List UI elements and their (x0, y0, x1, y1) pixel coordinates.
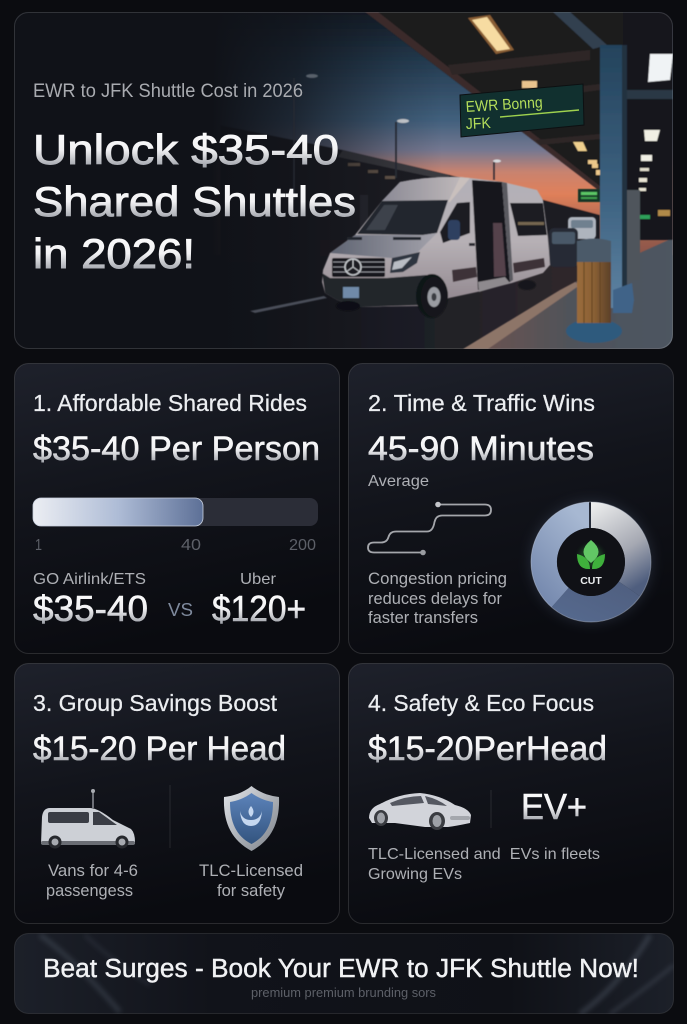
hero kicker: EWR to JFK Shuttle Cost in 2026 (33, 81, 303, 102)
bar scale labels: 1 (35, 537, 42, 554)
heading: 4. Safety & Eco Focus (368, 690, 594, 716)
heading: 1. Affordable Shared Rides (33, 390, 307, 416)
panel: safety and eco (348, 664, 674, 924)
bar scale labels: 200 (289, 537, 316, 554)
caption: licensed: for safety (217, 881, 285, 900)
sign: route display (460, 84, 584, 137)
caption (368, 846, 600, 883)
hero title: Unlock $35-40 (33, 126, 339, 173)
heading: 3. Group Savings Boost (33, 690, 278, 716)
icon: white van (41, 789, 135, 848)
comparison: GO Airlink: GO Airlink/ETS (33, 571, 146, 588)
caption: vans: Vans for 4-6 (48, 861, 138, 880)
congestion text: reduces delays for (368, 590, 502, 608)
panel: time and traffic (348, 364, 674, 654)
hero title (33, 126, 356, 277)
heading: 2. Time & Traffic Wins (368, 390, 595, 416)
icon: winding route (368, 502, 491, 555)
icon: silver sedan (369, 793, 471, 830)
comparison: Uber: Uber (240, 571, 277, 588)
caption: vans (46, 861, 138, 900)
left dark fade (14, 12, 428, 348)
icon: safety shield (224, 786, 279, 851)
hero photo: shuttle van at terminal curb (14, 12, 673, 349)
progress bar (33, 498, 318, 526)
panel: hero (14, 12, 673, 349)
comparison: Uber: $120+ (212, 588, 306, 629)
vs label: VS (168, 600, 193, 620)
call to action headline: Beat Surges - Book Your EWR to JFK Shuttle Now! (43, 955, 639, 983)
congestion text: faster transfers (368, 609, 478, 627)
average label: Average (368, 473, 429, 490)
panel: group savings (14, 664, 340, 924)
hero title: Shared Shuttles (33, 178, 356, 225)
caption: licensed (199, 861, 303, 900)
bar scale labels (35, 537, 316, 554)
congestion text (368, 570, 507, 627)
tagline: premium premium brunding sors (251, 986, 436, 1000)
duration headline: 45-90 Minutes (368, 430, 594, 468)
icon: green leaves (577, 540, 605, 569)
sign: route display: EWR Bonng (465, 94, 543, 116)
price headline: $35-40 Per Person (33, 430, 320, 468)
price headline: $15-20PerHead (368, 730, 607, 768)
donut chart with cut icon: CUT (580, 575, 602, 587)
comparison: GO Airlink (33, 571, 148, 629)
comparison: GO Airlink: $35-40 (33, 588, 148, 629)
caption: TLC-Licensed and EVs in fleets (368, 846, 600, 863)
comparison: Uber (212, 571, 306, 629)
panel: call to action (14, 934, 674, 1014)
panel: affordable shared rides (14, 364, 340, 654)
caption: vans: passengess (46, 881, 133, 900)
congestion text: Congestion pricing (368, 570, 507, 588)
price headline: $15-20 Per Head (33, 730, 286, 768)
sign: route display: JFK (465, 115, 492, 133)
hero title: in 2026! (33, 230, 195, 277)
caption: licensed: TLC-Licensed (199, 861, 303, 880)
EV+ badge: EV+ (521, 786, 587, 827)
bar scale labels: 40 (181, 537, 201, 554)
decorative light streaks (40, 935, 674, 1014)
caption: Growing EVs (368, 866, 462, 883)
donut chart with cut icon (531, 502, 651, 622)
